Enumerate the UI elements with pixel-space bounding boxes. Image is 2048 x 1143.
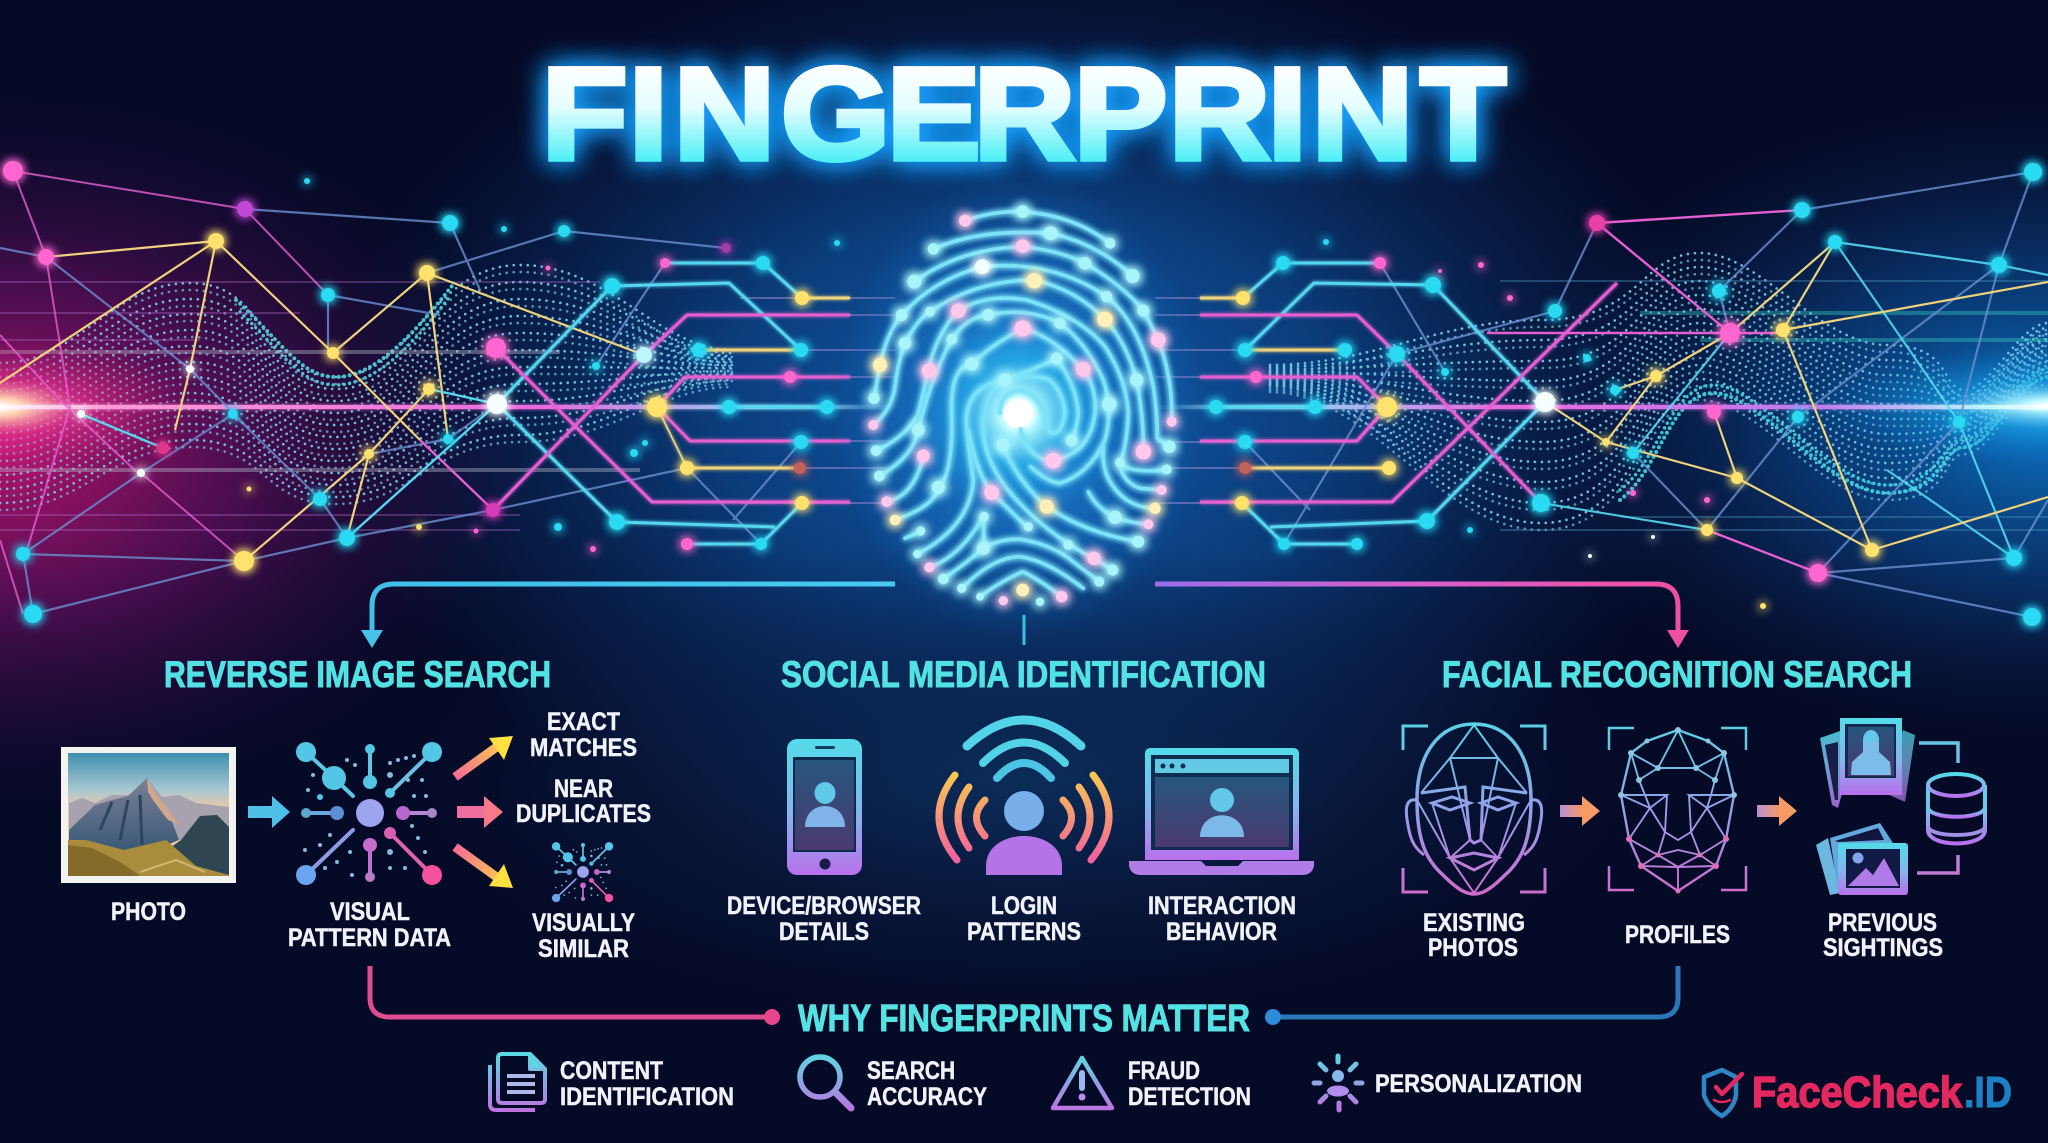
label: existing photos [1423,909,1525,962]
left flare [0,337,200,477]
label: visual pattern data: PATTERN DATA [288,924,451,952]
label: login patterns: LOGIN [991,892,1057,920]
nodes: right [1209,163,2042,626]
icon: laptop [1129,748,1314,875]
heading: reverse image search: REVERSE IMAGE SEARCH [164,654,551,695]
label: previous sightings: SIGHTINGS [1823,934,1943,962]
label: visual pattern data [288,898,451,952]
icon: mini pattern hub [552,842,613,902]
label: exact matches [530,708,637,762]
arrow: photo to pattern data [248,796,290,828]
connector: to social media identification [1022,615,1026,645]
label: search accuracy [867,1057,987,1111]
label: previous sightings [1823,909,1943,962]
icon: shield [1704,1070,1742,1116]
arrow: exact matches [455,736,513,777]
label: login patterns: PATTERNS [967,918,1081,946]
label: fraud detection [1128,1057,1251,1111]
label: device/browser details [727,892,921,946]
icon: personalization [1314,1056,1362,1110]
logo suffix: .ID [1964,1068,2012,1117]
label: content identification: IDENTIFICATION [560,1083,734,1111]
network: left [0,161,850,623]
circuit traces: left [493,263,850,544]
arrow: photos to profiles [1560,796,1600,826]
icon: visual pattern hub [296,742,442,885]
icon: portrait photo stack [1820,718,1915,808]
heading: social media identification: SOCIAL MEDIA IDENTIFICATION [781,654,1266,695]
logo text: FaceCheck [1752,1068,1962,1117]
icon: magnifier [800,1057,851,1108]
right flare [1808,345,2048,465]
icon: database [1928,774,1985,844]
label: search accuracy: ACCURACY [867,1083,987,1111]
panel: social media identification [727,720,1314,946]
dotted data wave: left [0,265,732,510]
label: visually similar: VISUALLY [532,909,635,937]
heading: why fingerprints matter: WHY FINGERPRINTS MATTER [798,998,1250,1040]
fingerprint [833,173,1207,640]
label: near duplicates: DUPLICATES [516,800,651,828]
label: content identification [560,1057,734,1111]
icon: document [490,1054,545,1110]
label: device/browser details: DETAILS [779,918,869,946]
label: interaction behavior [1148,892,1296,946]
connector: right to why fingerprints matter [1265,966,1678,1025]
connector: left to why fingerprints matter [370,966,780,1025]
label: exact matches: MATCHES [530,734,637,762]
icon: geometric face mesh [1609,727,1746,894]
arrow: visually similar [455,847,513,888]
panel: reverse image search [61,708,651,963]
connector arrow: to reverse image search [361,584,895,648]
label: interaction behavior: INTERACTION [1148,892,1296,920]
icon: warning triangle [1053,1058,1112,1108]
label: search accuracy: SEARCH [867,1057,955,1085]
label: content identification: CONTENT [560,1057,663,1085]
label: fraud detection: DETECTION [1128,1083,1251,1111]
connector arrow: to facial recognition search [1155,584,1689,648]
icon: phone [787,739,862,875]
fingerprint nodes [868,205,1177,606]
heading: facial recognition search: FACIAL RECOGNITION SEARCH [1442,654,1912,695]
label: near duplicates: NEAR [554,775,613,803]
icon: mountain photo [61,747,236,883]
label: login patterns [967,892,1081,946]
central horizontal beam [0,405,2048,409]
panel: facial recognition search [1403,718,1985,962]
title: FINGERPRINT [542,40,1506,187]
fingerprint ridges [873,212,1172,597]
label: personalization: PERSONALIZATION [1375,1070,1582,1098]
arrow: near duplicates [457,796,503,828]
dotted data wave: right [1270,253,2048,530]
label: visually similar [532,909,635,963]
label: visually similar: SIMILAR [538,935,629,963]
label: previous sightings: PREVIOUS [1828,909,1937,937]
arrow: profiles to sightings [1757,796,1797,826]
label: existing photos: PHOTOS [1428,934,1518,962]
network: right [1200,163,2048,626]
label: existing photos: EXISTING [1423,909,1525,937]
label: exact matches: EXACT [547,708,620,736]
icon: landscape photo stack [1816,823,1908,895]
label: near duplicates [516,775,651,828]
label: interaction behavior: BEHAVIOR [1166,918,1277,946]
horizontal light streaks [0,281,2048,530]
label: profiles: PROFILES [1625,921,1730,949]
icon: login signal person [939,720,1109,875]
label: photo: PHOTO [111,898,186,926]
label: fraud detection: FRAUD [1128,1057,1200,1085]
icon: face mesh outline [1403,724,1545,894]
bracket connectors [1917,743,1958,873]
logo: FaceCheck.ID [1704,1068,2012,1117]
label: visual pattern data: VISUAL [330,898,410,926]
nodes: left [3,161,840,623]
circuit traces: right [1200,263,1617,544]
row: why fingerprints matter items [490,1054,1582,1111]
label: device/browser details: DEVICE/BROWSER [727,892,921,920]
